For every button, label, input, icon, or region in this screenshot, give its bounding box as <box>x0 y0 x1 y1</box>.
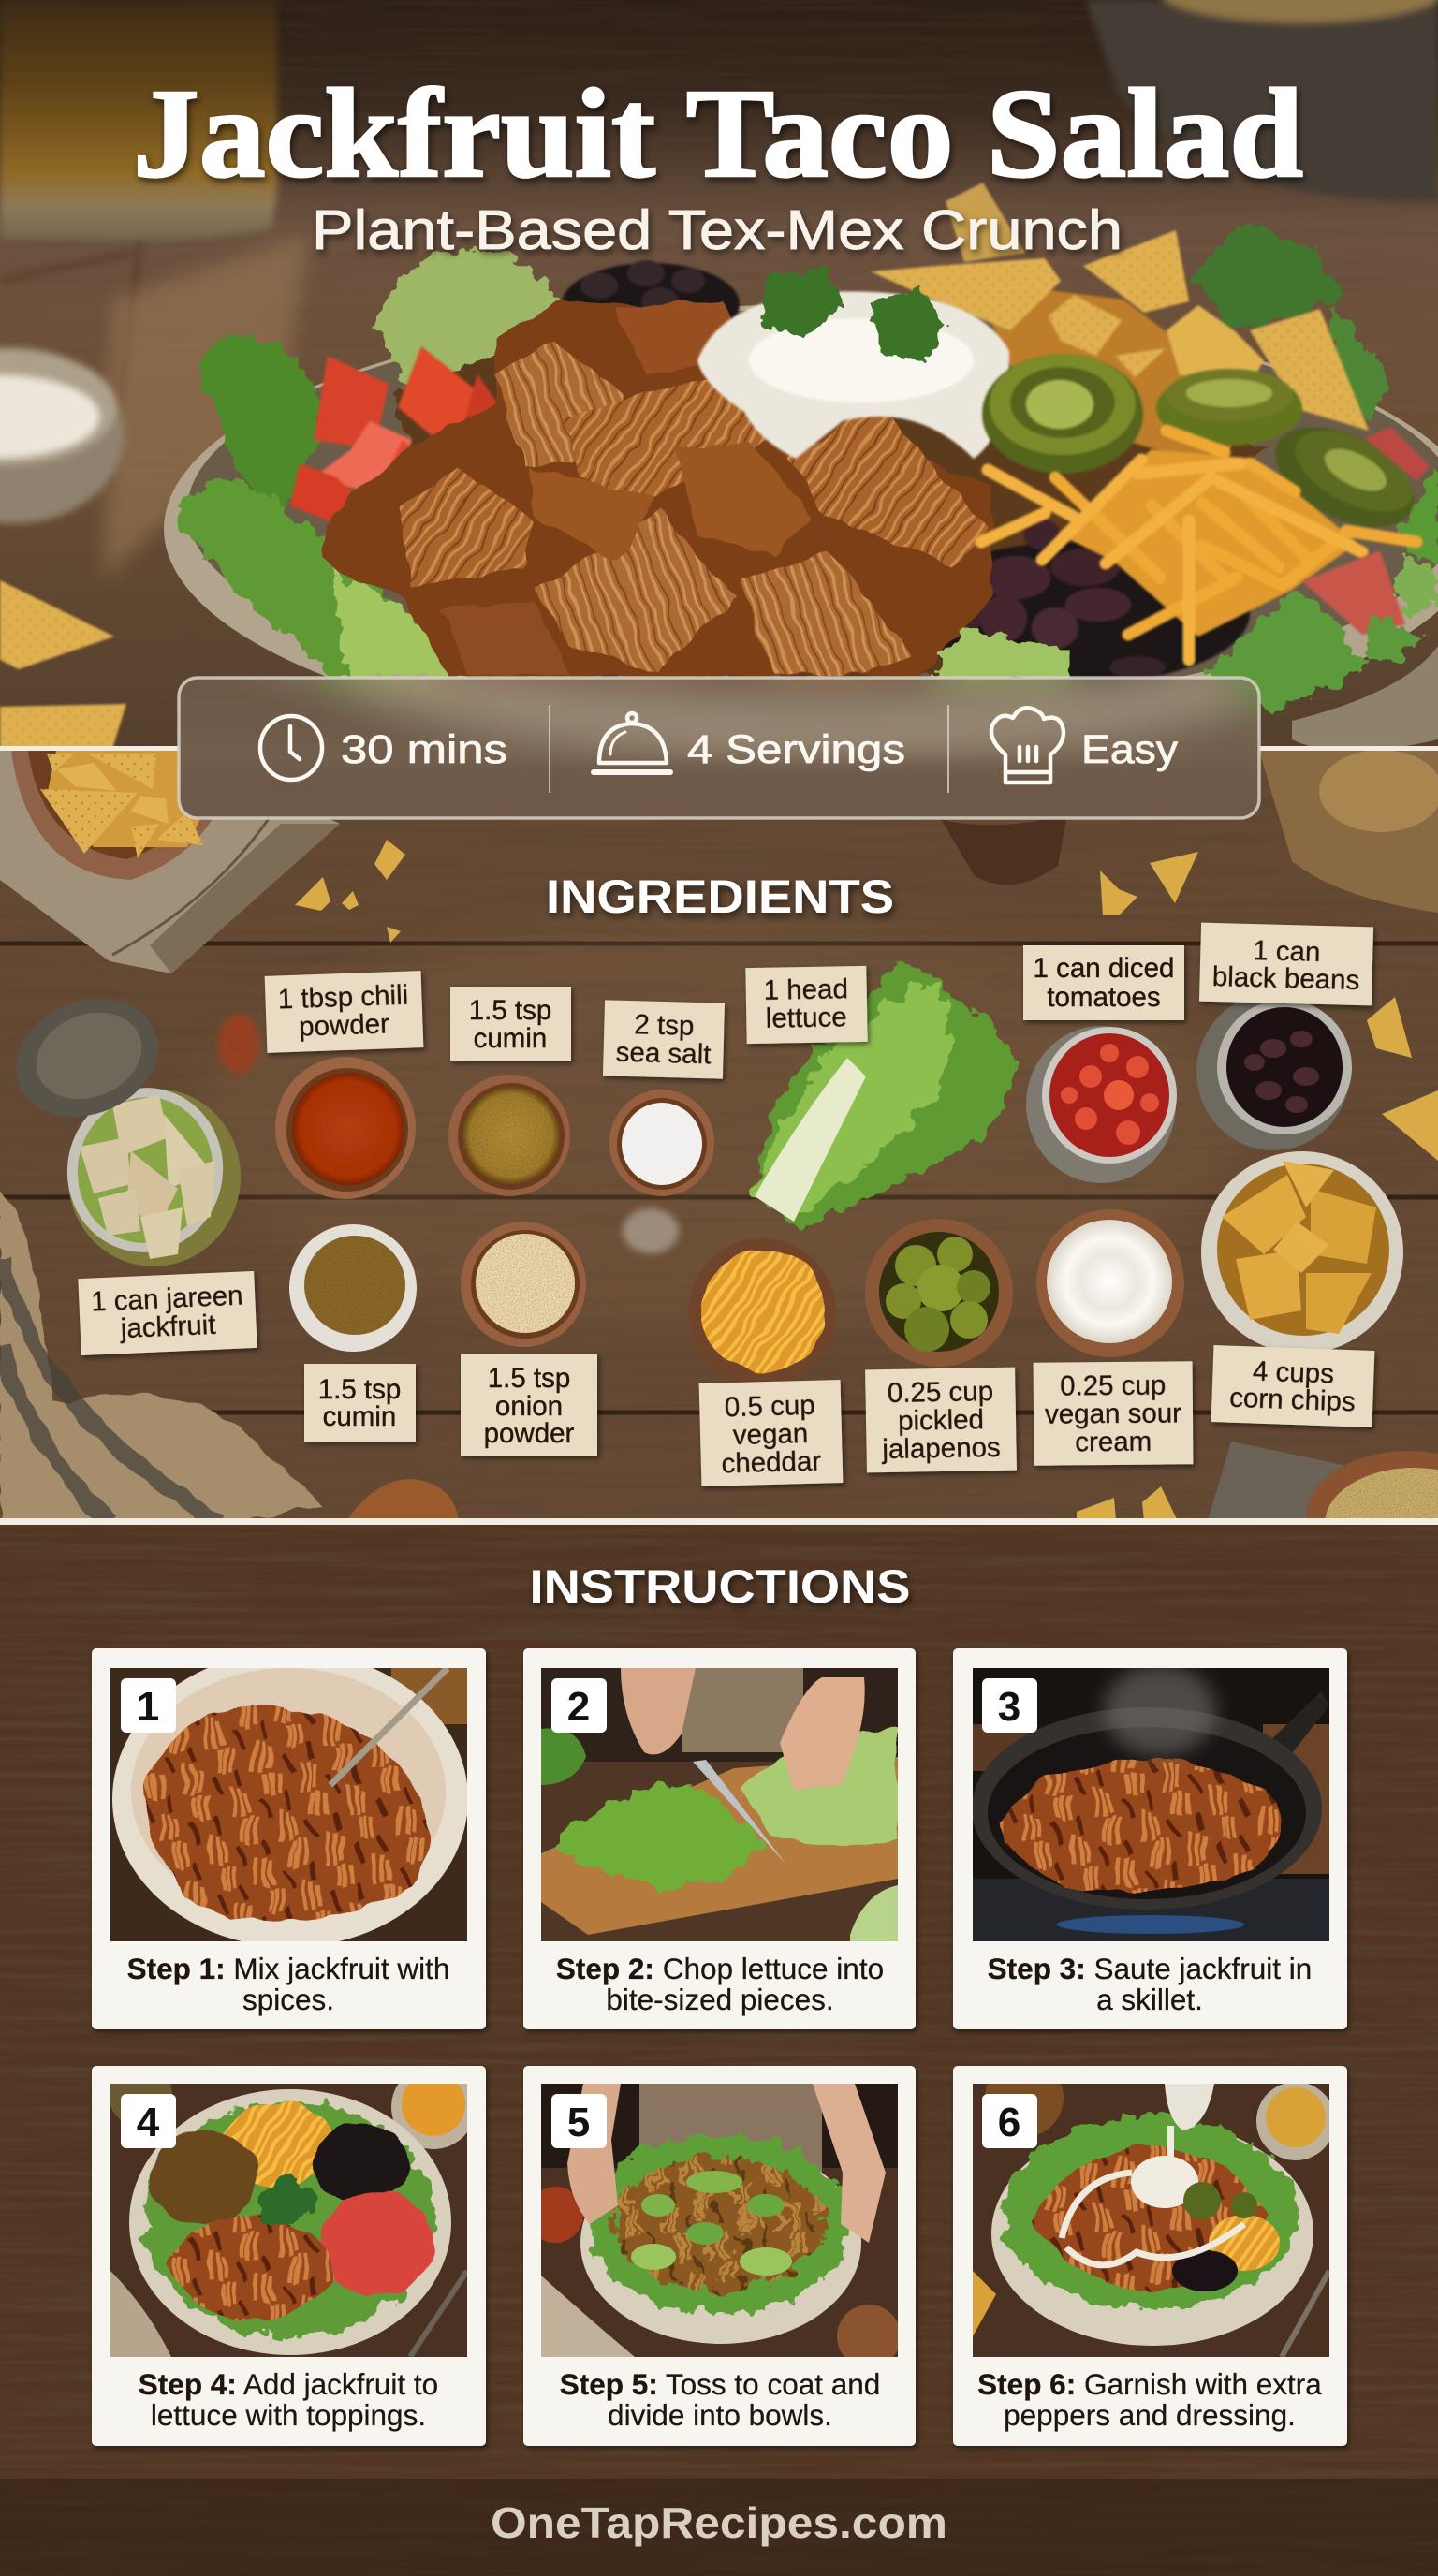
image: mixing bowl <box>110 1668 467 1941</box>
step card 2 <box>523 1648 916 2029</box>
label: 1 can black beans: 1 can <box>1253 935 1321 968</box>
image: assembled bowl <box>110 2084 467 2357</box>
caption 2: bite-sized pieces. <box>606 1983 834 2016</box>
label: 1 head lettuce <box>745 966 868 1044</box>
label: 0.25 cup vegan sour cream: cream <box>1075 1427 1152 1457</box>
divider one <box>549 705 550 793</box>
label: 0.25 cup pickled jalapenos <box>865 1368 1017 1472</box>
step card 5 <box>523 2066 916 2446</box>
divider line below ingredients <box>0 1518 1438 1525</box>
spilled salt <box>623 1208 679 1253</box>
bowl: sea salt <box>609 1090 714 1196</box>
divider line below hero <box>0 746 1438 751</box>
label: 0.25 cup pickled jalapenos: jalapenos <box>881 1432 1001 1465</box>
label: 1.5 tsp onion powder: onion <box>495 1391 563 1422</box>
icon: chef hat <box>991 708 1064 783</box>
image: chopping lettuce <box>541 1668 898 1941</box>
badge 3 <box>982 1678 1037 1733</box>
side chips <box>0 580 126 749</box>
label: 1 tbsp chili powder <box>265 971 423 1053</box>
caption 5: Step 5: Toss to coat and <box>560 2367 880 2401</box>
grey napkin bottom right <box>1208 1442 1343 1521</box>
step card 6 <box>953 2058 1347 2446</box>
bowl: cheddar <box>688 1238 836 1386</box>
jackfruit <box>323 300 992 677</box>
icon: clock <box>260 716 322 780</box>
burlap cloth <box>0 1189 323 1526</box>
label: 0.25 cup vegan sour cream <box>1034 1361 1193 1466</box>
badge 5 <box>551 2094 607 2148</box>
caption 4: lettuce with toppings. <box>151 2398 426 2432</box>
label: 1.5 tsp cumin lower: cumin <box>323 1401 396 1432</box>
label: 2 tsp sea salt: sea salt <box>615 1037 712 1070</box>
bowl: onion powder <box>461 1222 586 1347</box>
badge 2 <box>551 1678 607 1733</box>
label: 1.5 tsp cumin lower: 1.5 tsp <box>318 1374 401 1405</box>
label: 1.5 tsp onion powder: 1.5 tsp <box>488 1363 570 1394</box>
label: 1 can diced tomatoes: tomatoes <box>1047 982 1161 1013</box>
image: tossing salad <box>541 2084 898 2357</box>
beer glass <box>0 0 277 241</box>
label: 0.25 cup vegan sour cream: vegan sour <box>1045 1398 1181 1430</box>
panel: hero title block <box>133 64 1303 261</box>
shredded cheddar <box>981 431 1416 660</box>
caption 3: Step 3: Saute jackfruit in <box>988 1952 1312 1985</box>
caption 5: divide into bowls. <box>608 2398 832 2432</box>
caption 2: Step 2: Chop lettuce into <box>556 1952 884 1985</box>
label: 0.25 cup vegan sour cream: 0.25 cup <box>1060 1370 1166 1401</box>
label: 0.5 cup vegan cheddar: cheddar <box>721 1446 822 1479</box>
spoon bottom <box>346 1479 459 1521</box>
cilantro <box>758 267 946 365</box>
panel: stats bar <box>0 0 1438 838</box>
image: garnished bowl <box>973 2084 1329 2357</box>
bowl: jalapenos <box>865 1219 1013 1367</box>
label: 1.5 tsp cumin: cumin <box>474 1023 547 1054</box>
stat: servings: 4 Servings <box>687 727 905 772</box>
label: 0.25 cup pickled jalapenos: pickled <box>898 1404 984 1437</box>
label: 1 tbsp chili powder: 1 tbsp chili <box>277 980 409 1015</box>
label: 1 can black beans <box>1199 923 1373 1005</box>
can of jackfruit <box>0 978 255 1281</box>
label: 1.5 tsp cumin lower <box>304 1364 416 1442</box>
label: 0.5 cup vegan cheddar <box>699 1380 843 1486</box>
label: 1 can jareen jackfruit: jackfruit <box>119 1310 216 1344</box>
label: 1.5 tsp cumin <box>450 987 571 1061</box>
can: black beans <box>1196 993 1352 1150</box>
label: 4 cups corn chips: 4 cups <box>1252 1356 1335 1390</box>
caption 4: Step 4: Add jackfruit to <box>139 2367 438 2401</box>
footer website: OneTapRecipes.com <box>491 2498 947 2547</box>
bowl: corn chips <box>1201 1151 1403 1354</box>
panel: ingredients <box>0 749 1438 1582</box>
heading: instructions: INSTRUCTIONS <box>530 1560 910 1613</box>
bowl of chips top left <box>11 751 234 880</box>
caption 1: Step 1: Mix jackfruit with <box>127 1952 449 1985</box>
badge 1: 1 <box>137 1684 159 1730</box>
label: 1 can jareen jackfruit <box>78 1271 257 1355</box>
label: 1 can jareen jackfruit: 1 can jareen <box>90 1280 243 1318</box>
label: 0.5 cup vegan cheddar: vegan <box>732 1418 809 1451</box>
label: 2 tsp sea salt: 2 tsp <box>634 1009 695 1042</box>
step card 3 <box>953 1648 1347 2029</box>
image: skillet <box>973 1668 1329 1941</box>
salad bowl <box>164 304 1438 754</box>
sour cream <box>697 291 1009 459</box>
heading: ingredients: INGREDIENTS <box>546 871 894 923</box>
bowl: cumin white <box>289 1224 417 1352</box>
label: 1 can diced tomatoes <box>1023 945 1184 1020</box>
panel: hero photo <box>0 0 1438 754</box>
can: tomatoes <box>1026 1026 1177 1183</box>
bowl: sour cream <box>1036 1209 1184 1357</box>
spilled chili <box>218 1014 259 1074</box>
footer band <box>0 2479 1438 2576</box>
label: 2 tsp sea salt <box>603 1000 725 1079</box>
label: 1 head lettuce: lettuce <box>766 1002 847 1034</box>
label: 4 cups corn chips <box>1211 1345 1374 1427</box>
label: 4 cups corn chips: corn chips <box>1229 1383 1356 1417</box>
badge 6: 6 <box>998 2100 1020 2145</box>
chips <box>871 183 1369 468</box>
caption 1: spices. <box>242 1983 334 2016</box>
lettuce <box>178 223 1438 679</box>
romaine lettuce <box>753 962 1016 1226</box>
bowl bottom right <box>1306 1451 1438 1582</box>
label: 1.5 tsp cumin: 1.5 tsp <box>469 995 551 1026</box>
badge 5: 5 <box>567 2100 590 2145</box>
label: 1.5 tsp onion powder <box>461 1354 597 1456</box>
badge 1 <box>121 1678 176 1733</box>
subtitle: Plant-Based Tex-Mex Crunch <box>312 199 1123 261</box>
background bowl <box>1086 0 1438 201</box>
caption 3: a skillet. <box>1096 1983 1203 2016</box>
step card 4 <box>92 2063 486 2446</box>
jalapenos <box>982 354 1430 548</box>
bowl: chili powder <box>275 1057 416 1199</box>
icon: cloche <box>594 713 670 772</box>
front lettuce <box>936 556 1438 717</box>
step card 1 <box>92 1648 486 2029</box>
label: 0.25 cup pickled jalapenos: 0.25 cup <box>888 1376 993 1409</box>
stat: difficulty: Easy <box>1081 727 1179 772</box>
badge 4: 4 <box>137 2100 160 2145</box>
scattered chips <box>295 840 1438 1521</box>
label: 1 tbsp chili powder: powder <box>299 1008 390 1043</box>
badge 4 <box>121 2094 176 2148</box>
label: 1 can diced tomatoes: 1 can diced <box>1034 953 1174 984</box>
tomatoes <box>290 346 510 524</box>
panel: instructions <box>0 1525 1438 2576</box>
label: 0.5 cup vegan cheddar: 0.5 cup <box>724 1390 815 1423</box>
caption 6: peppers and dressing. <box>1004 2398 1296 2432</box>
label: 1 can black beans: black beans <box>1211 961 1360 996</box>
stat: time: 30 mins <box>341 727 507 772</box>
spice basket top right <box>1259 750 1438 913</box>
side tomatoes <box>1302 427 1430 635</box>
bowl: cumin <box>448 1075 570 1196</box>
small wooden pot <box>941 814 1067 885</box>
title: Jackfruit Taco Salad <box>133 64 1303 204</box>
label: 1 head lettuce: 1 head <box>763 973 848 1006</box>
divider two <box>947 705 949 793</box>
badge 2: 2 <box>567 1684 590 1730</box>
badge 6 <box>982 2094 1037 2148</box>
badge 3: 3 <box>998 1684 1020 1730</box>
side bowl of cream <box>0 347 125 523</box>
tea towel top left <box>0 749 340 973</box>
label: 1.5 tsp onion powder: powder <box>484 1418 575 1449</box>
caption 6: Step 6: Garnish with extra <box>977 2367 1322 2401</box>
black beans <box>562 260 1250 684</box>
